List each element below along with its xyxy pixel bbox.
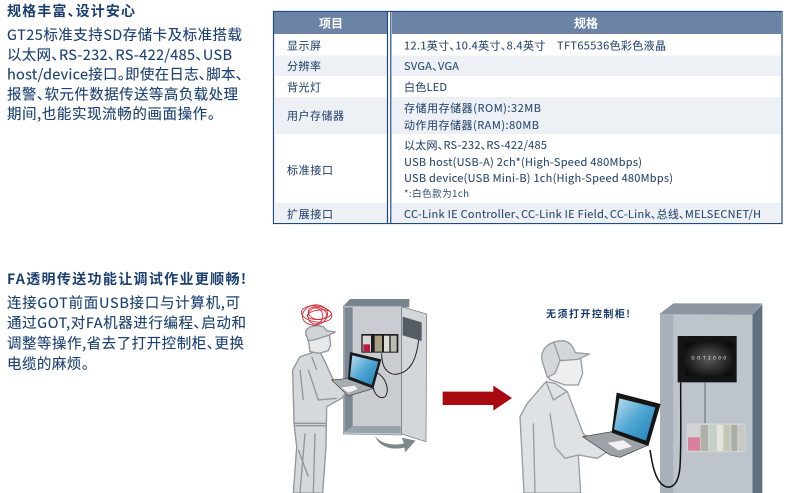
body paragraph: FA transparent transfer: 电缆的麻烦。: [7, 353, 89, 374]
row: resolution: SVGA、VGA: [404, 58, 459, 74]
laptop: [332, 352, 387, 398]
USB cable: [650, 382, 681, 487]
laptop: [583, 393, 661, 457]
body paragraph: specifications: host/device接口。即使在日志、脚本、: [7, 64, 243, 84]
row: backlight: [287, 79, 447, 95]
open control cabinet: [343, 299, 427, 442]
row: backlight: 背光灯: [287, 79, 321, 95]
row: standard interfaces: 以太网、RS-232、RS-422/485: [404, 137, 547, 153]
row: user memory: [287, 100, 541, 133]
PLC rack: [361, 334, 398, 353]
row: backlight: 白色LED: [404, 79, 447, 95]
row: user memory: 用户存储器: [287, 108, 344, 124]
row: standard interfaces: *:白色款为1ch: [404, 186, 469, 200]
body paragraph: FA transparent transfer: 通过GOT,对FA机器进行编程、启动和: [7, 312, 246, 333]
heading: FA transparent transfer: FA透明传送功能让调试作业更顺畅!: [7, 269, 246, 289]
body paragraph: FA transparent transfer: [7, 292, 246, 374]
panel: specification table: [274, 12, 782, 224]
heading: specifications: 规格丰富、设计安心: [7, 1, 135, 21]
table header row: 规格: [574, 14, 598, 32]
row: standard interfaces: USB host(USB-A) 2ch*(High-Speed 480Mbps): [404, 154, 642, 170]
table header row: [274, 12, 781, 34]
row: standard interfaces: [287, 137, 673, 200]
body paragraph: specifications: 报警、软元件数据传送等高负载处理: [7, 84, 238, 104]
body paragraph: specifications: 期间,也能实现流畅的画面操作。: [7, 103, 215, 124]
row: resolution: 分辨率: [287, 58, 321, 74]
red arrow: [443, 386, 512, 411]
illustration: no need to open cabinet: [520, 303, 762, 493]
row: standard interfaces: USB device(USB Mini-B) 1ch(High-Speed 480Mbps): [404, 170, 673, 186]
GOT touch panel: [678, 336, 737, 382]
confusion scribble: [300, 303, 333, 327]
row: expansion interfaces: CC-Link IE Controller、CC-Link IE Field、CC-Link、总线、MELSECNET/H: [404, 206, 761, 222]
row: user memory: 动作用存储器(RAM):80MB: [404, 117, 539, 133]
worker at laptop: [520, 341, 610, 493]
PLC rack: [687, 423, 746, 452]
confused worker: [293, 326, 348, 493]
row: display: [287, 38, 666, 54]
row: display: 显示屏: [287, 38, 321, 54]
callout: 无须打开控制柜!: [546, 305, 630, 320]
door swing arrow: [375, 436, 416, 452]
text block: FA transparent transfer: [7, 269, 246, 374]
illustration: opening the control cabinet: [293, 299, 512, 493]
body paragraph: FA transparent transfer: 连接GOT前面USB接口与计算机,可: [7, 292, 240, 313]
body paragraph: specifications: [7, 24, 243, 124]
text block: specifications intro: [7, 1, 243, 124]
row: expansion interfaces: 扩展接口: [287, 206, 333, 222]
body paragraph: specifications: 以太网、RS-232、RS-422/485、USB: [7, 44, 232, 65]
table header row: 项目: [319, 14, 343, 32]
row: display: 12.1英寸、10.4英寸、8.4英寸 TFT65536色彩色液晶: [404, 38, 666, 54]
GOT touch panel: GOT2000: [691, 355, 726, 361]
row: resolution: [287, 58, 459, 74]
panel to PLC cable: [703, 382, 707, 423]
body paragraph: FA transparent transfer: 调整等操作,省去了打开控制柜、更换: [7, 332, 244, 354]
cabinet cable: [382, 340, 419, 374]
row: user memory: 存储用存储器(ROM):32MB: [404, 100, 541, 116]
row: standard interfaces: 标准接口: [287, 162, 333, 178]
closed control cabinet: [659, 303, 762, 493]
body paragraph: specifications: GT25标准支持SD存储卡及标准搭载: [7, 24, 242, 45]
